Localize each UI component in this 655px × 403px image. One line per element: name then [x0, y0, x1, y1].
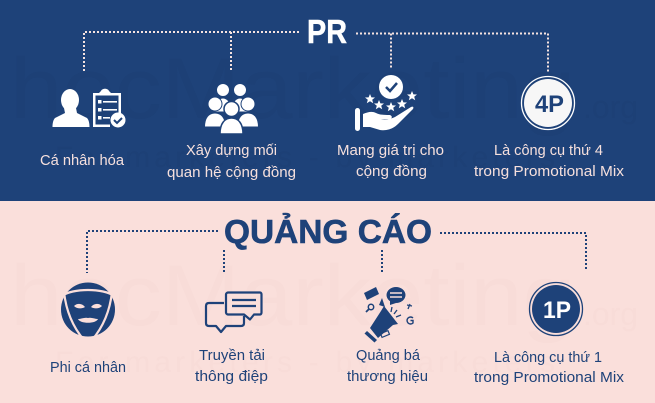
item: Truyền tải thông điệp: thông điệp	[195, 369, 268, 385]
icon: person with checklist	[52, 89, 126, 128]
icon: megaphone	[364, 287, 413, 342]
label: Phi cá nhân	[50, 360, 126, 376]
label: Là công cụ thứ 4	[494, 143, 603, 159]
panel: PR	[0, 0, 655, 201]
watermark: PR panel: hocMarketing	[10, 41, 575, 137]
heading: Quảng cáo: QUẢNG CÁO	[224, 213, 432, 250]
watermark: PR panel: .org	[583, 89, 638, 125]
heading: PR: PR	[307, 13, 347, 50]
item: Cá nhân hóa	[40, 89, 126, 169]
icon: 1P badge: 1P	[543, 297, 571, 324]
item: 4P	[474, 76, 625, 180]
item: Xây dựng mối quan hệ cộng đồng: quan hệ cộng đồng	[167, 165, 296, 181]
item: Xây dựng mối quan hệ cộng đồng	[167, 84, 296, 181]
item: Mang giá trị cho cộng đồng	[337, 75, 444, 180]
item: Quảng bá thương hiệu	[347, 287, 428, 385]
label: Mang giá trị cho	[337, 143, 444, 159]
watermark: Quảng cáo panel: .org	[583, 296, 638, 332]
label: Là công cụ thứ 1	[494, 350, 602, 366]
label: Xây dựng mối	[186, 143, 277, 159]
connector: Quảng cáo right branch	[440, 233, 586, 271]
item: Phi cá nhân	[50, 282, 126, 376]
icon: 1P badge	[530, 282, 582, 336]
item: Truyền tải thông điệp	[195, 292, 268, 385]
watermark: Quảng cáo panel: hocMarketing	[10, 248, 575, 344]
icon: 4P badge: 4P	[535, 91, 564, 118]
item: Mang giá trị cho cộng đồng: cộng đồng	[356, 164, 427, 180]
item: 1P: trong Promotional Mix	[474, 370, 625, 386]
connector: Quảng cáo left branch	[87, 231, 218, 273]
watermark: Quảng cáo panel: For marketers - by marketers	[55, 346, 555, 379]
icon: mask	[61, 282, 115, 340]
watermark: PR panel: For marketers - by marketers	[55, 141, 555, 174]
watermark: PR panel	[10, 41, 638, 174]
icon: 4P badge	[522, 76, 574, 130]
label: Cá nhân hóa	[40, 153, 125, 169]
icon: chat bubbles	[206, 292, 262, 332]
label: Quảng bá	[356, 348, 421, 364]
panel: Quảng cáo	[0, 201, 655, 403]
connector: PR right branch	[356, 34, 548, 72]
label: Truyền tải	[199, 348, 265, 364]
item: 1P	[474, 282, 625, 386]
item: 4P: trong Promotional Mix	[474, 164, 625, 180]
icon: group of people	[204, 84, 258, 134]
connector: PR left branch	[84, 32, 299, 71]
item: Quảng bá thương hiệu: thương hiệu	[347, 369, 428, 385]
watermark: Quảng cáo panel	[10, 248, 638, 379]
icon: hand with stars and check	[355, 75, 417, 131]
